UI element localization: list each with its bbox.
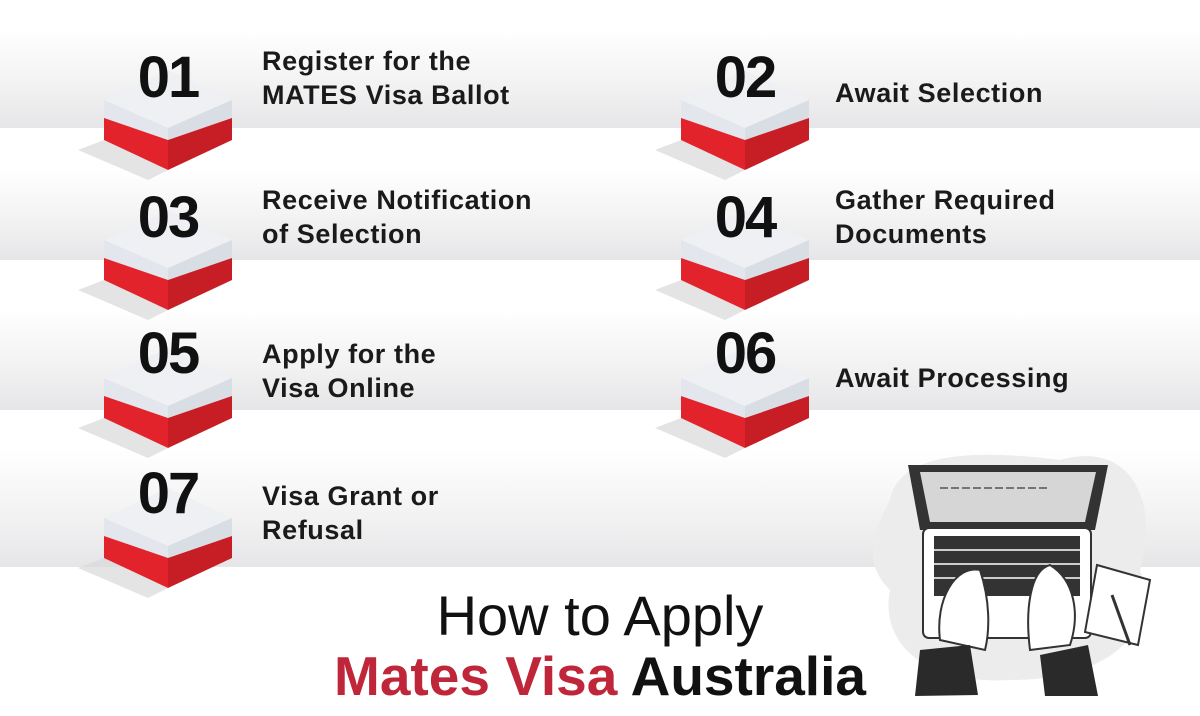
number 04: 04 [715,185,775,250]
label 05: Apply for the [262,339,436,369]
label 01: MATES Visa Ballot [262,80,510,110]
title [334,584,866,707]
number 07: 07 [138,461,198,526]
label 01 [262,46,510,110]
number 05: 05 [138,321,198,386]
cube 04 [655,210,809,320]
label 01: Register for the [262,46,471,76]
title: How to Apply [437,584,763,647]
cube 05 [78,348,232,458]
illustration: laptop with hands [875,454,1152,696]
number 01: 01 [138,45,198,110]
label 05 [262,339,436,403]
label 07: Visa Grant or [262,481,439,511]
label 03: of Selection [262,219,422,249]
label 04: Documents [835,219,987,249]
number 02: 02 [715,45,775,110]
label 07: Refusal [262,515,364,545]
label 04: Gather Required [835,185,1056,215]
label 05: Visa Online [262,373,415,403]
title: Mates Visa Australia [334,645,866,707]
cube 01 [78,70,232,180]
label 03 [262,185,532,249]
label 03: Receive Notification [262,185,532,215]
cube 02 [655,70,809,180]
cube 07 [78,488,232,598]
label 07 [262,481,439,545]
label 06: Await Processing [835,363,1069,393]
label 04 [835,185,1056,249]
cube 06 [655,348,809,458]
number 06: 06 [715,321,775,386]
number 03: 03 [138,185,198,250]
label 02: Await Selection [835,78,1043,108]
cube 03 [78,210,232,320]
